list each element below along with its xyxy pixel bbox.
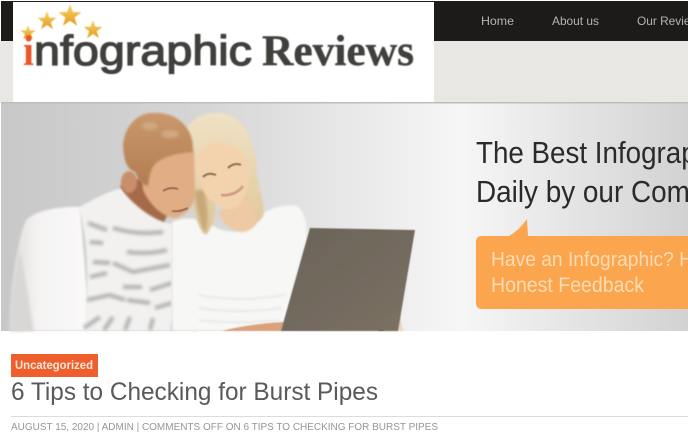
logo wordmark: i [23,28,34,75]
post meta: AUGUST 15, 2020 | ADMIN | COMMENTS OFF ON 6 TIPS TO CHECKING FOR BURST PIPES [11,422,438,433]
logo wordmark: nfographic [34,27,252,74]
category tag: Uncategorized [15,358,93,372]
photo: couple with laptop [10,113,415,331]
sweater stripes [84,223,197,330]
nav item: Home: Home [481,14,514,28]
orange speech bubble: Honest Feedback [491,274,644,297]
man's hair [123,113,193,186]
logo wordmark: Reviews [262,28,414,75]
logo wordmark [23,27,414,75]
hero headline [476,136,688,209]
man's eye and mouth [163,188,188,211]
man's hair highlights [142,122,179,138]
icon: rating stars [20,4,102,39]
orange speech bubble [476,219,688,309]
laptop lid [281,228,415,331]
woman's white top [172,206,307,331]
divider [11,416,688,418]
man's neck [120,178,170,222]
man's ear [121,171,137,193]
hero banner [1,102,688,331]
nav item: About us: About us [552,14,599,28]
woman's neck [218,196,258,232]
header band [0,41,688,103]
white jacket [10,207,90,331]
logo panel [13,2,434,102]
man's face [142,150,195,218]
woman's face [197,142,250,209]
navigation bar [1,1,688,41]
post title: 6 Tips to Checking for Burst Pipes [11,378,378,406]
hands on laptop [222,322,284,331]
woman's eyes and smile [203,164,243,195]
category tag [11,354,98,377]
man's sweater [78,188,172,331]
woman's hair [186,113,264,235]
